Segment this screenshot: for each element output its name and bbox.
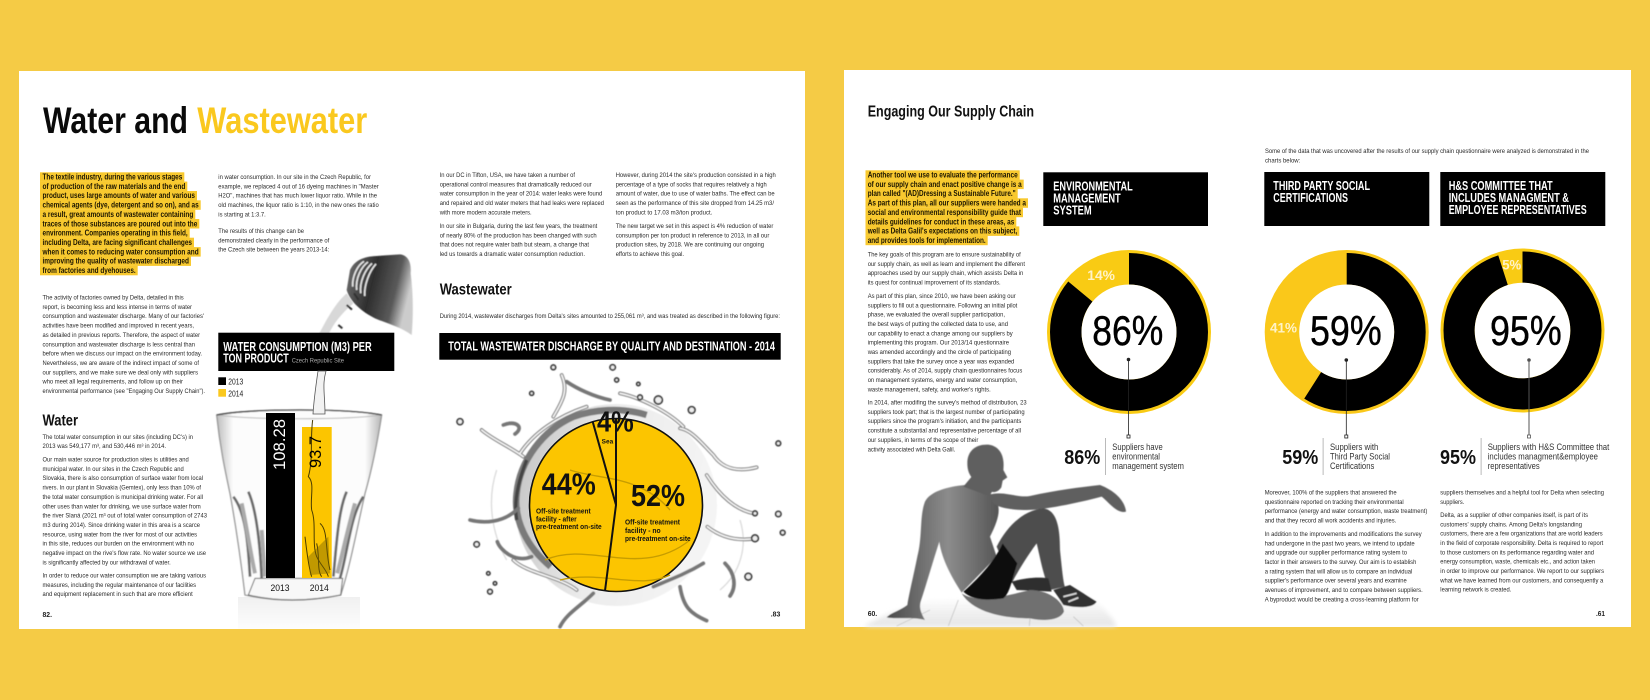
body text: Delta as a supplier: energy consumption, waste, chemicals etc., and action taken [1440, 559, 1595, 566]
label: 44% off-site after pre-treatment: Off-site treatment [536, 506, 591, 515]
label: 4% Sea: Sea [602, 438, 614, 445]
chart title box: water consumption per ton product: TON PRODUCT [223, 352, 289, 366]
body text: suppliers results and rating: performance (energy and water consumption, waste treatment) [1265, 508, 1427, 515]
body text: program goals and survey: activity associated with Delta Galil. [868, 446, 955, 453]
legend: 2013 and 2014: 2013 [228, 377, 244, 386]
body text: program goals and survey: our suppliers, in terms of the scope of their [868, 437, 979, 444]
label: 44% off-site after pre-treatment [536, 466, 602, 531]
chart title box: water consumption per ton product: WATER CONSUMPTION (M3) PER [223, 340, 372, 354]
illustration: seated man photo [863, 445, 1126, 627]
label: 52% off-site no pre-treatment: pre-treatment on-site [625, 534, 691, 543]
body text: water consumption Czech site: is starting at 1:3.7. [218, 211, 266, 218]
chart title box: H&S committee: INCLUDES MANAGMENT & [1449, 191, 1569, 205]
body text: activity of factories: before when we discuss our impact on the environment today. [42, 351, 202, 358]
caption: 95% suppliers with H&S committee: representatives [1488, 461, 1540, 471]
body text: Delta as a supplier: Delta, as a supplier of other companies itself, is part of its [1440, 512, 1588, 519]
chart title box: total wastewater discharge [439, 333, 781, 360]
caption: 59% suppliers with third party social certifications: 59% [1282, 447, 1318, 469]
right arm [988, 485, 1126, 512]
caption: 86% suppliers have environmental management system [1064, 438, 1184, 475]
glass reflection [238, 597, 360, 629]
body text: Delta as a supplier [1439, 490, 1604, 594]
label: 4% Sea: 4% [597, 407, 634, 439]
highlighted intro text: textile industry: traces of those substances are poured out into the [42, 219, 198, 228]
body text: water consumption: m3 during 2014). Since drinking water in this area is a scarce [42, 522, 200, 529]
page number 82: 82. [42, 612, 52, 619]
body text: program goals and survey: suppliers to fill out a questionnaire. Following an initial pilot [868, 302, 1017, 309]
body text: Tifton and Bulgaria: operational control measures that dramatically reduced our [440, 181, 592, 188]
body text: activity of factories: our suppliers, and we make sure we deal only with suppliers [42, 369, 198, 376]
body text: program goals and survey: approaches used by our supply chain, which assists Delta in [868, 270, 1024, 277]
chart title box: third party social certifications [1264, 172, 1429, 226]
highlighted intro text: sustainable future plan: of our supply chain and enact positive change is a [868, 180, 1022, 189]
caption: 59% suppliers with third party social certifications [1282, 438, 1390, 475]
legend: 2013 and 2014: 2014 [228, 389, 244, 398]
floor [863, 597, 1117, 627]
label: 52% off-site no pre-treatment: Off-site treatment [625, 517, 680, 526]
body text: Delta as a supplier: suppliers. [1440, 499, 1464, 506]
donut chart: environmental management system 86%: 14% [1087, 267, 1116, 283]
body text: 2014 production and target: The new target we set in this aspect is 4% reduction of water [616, 223, 774, 230]
donut chart: third party social certifications 59% [1265, 250, 1429, 414]
donut chart: third party social certifications 59%: 41% [1270, 320, 1298, 336]
body text: suppliers results and rating: questionnaire reported on tracking their environmental [1265, 499, 1404, 506]
chart title box: third party social certifications: CERTIFICATIONS [1273, 191, 1348, 205]
body text: water consumption Czech site: example, we replaced 4 out of 16 dyeing machines in "Master [218, 183, 380, 190]
body text: activity of factories: consumption and wastewater discharge is less central than [42, 341, 195, 348]
body text: program goals and survey: on management systems, energy and water consumption, [868, 377, 1017, 384]
body text: water consumption: measures, including the regular maintenance of our facilities [42, 582, 196, 589]
title: Water and Wastewater: Water and [43, 100, 188, 141]
body text: water consumption: and equipment replacement in such that are more efficient [42, 591, 193, 598]
glass [217, 410, 382, 600]
body text: 2014 production and target: ton product to 17.03 m3/ton product. [616, 209, 713, 216]
value label 93.7: 93.7 [306, 436, 325, 468]
body text: water consumption [42, 434, 207, 598]
body text: water consumption: the total water consumption is municipal drinking water. For all [42, 494, 203, 501]
body text: activity of factories: The activity of factories owned by Delta, detailed in this [42, 294, 184, 302]
body text: activity of factories: consumption and wastewater discharge. Many of our factories' [42, 313, 204, 320]
body text: water consumption: is significantly affected by our withdrawal of water. [42, 559, 171, 566]
body text: Tifton and Bulgaria [439, 172, 604, 258]
chart title box: H&S committee: EMPLOYEE REPRESENTATIVES [1449, 203, 1587, 217]
body text: water consumption Czech site [218, 174, 380, 254]
body text: Delta as a supplier: what we have learned from our customers, and consequently a [1439, 577, 1604, 584]
raised leg [997, 508, 1065, 590]
bar: 2013 value 108.28 [266, 413, 295, 578]
body text: water consumption Czech site: The results of this change can be [218, 228, 304, 235]
caption: 86% suppliers have environmental management system: 86% [1064, 447, 1100, 469]
bar chart in glass: water consumption 2013 vs 2014 [217, 371, 382, 629]
body text: Delta as a supplier: in order to improve our performance. We report to our suppliers [1440, 568, 1604, 575]
donut chart: H&S committee 95%: 95% [1490, 307, 1562, 354]
caption: 95% suppliers with H&S committee [1440, 438, 1610, 475]
highlighted intro text: textile industry: improving the quality of wastewater discharged [42, 257, 189, 266]
highlighted intro text: textile industry: a result, great amounts of wastewater containing [42, 210, 193, 219]
page number 61: .61 [1596, 611, 1605, 618]
body text: suppliers results and rating: had undergone in the past two years, we intend to update [1265, 540, 1415, 547]
highlighted intro text: sustainable future plan: well as Delta Galil's expectations on this subject, [867, 227, 1017, 236]
label: 44% off-site after pre-treatment: pre-treatment on-site [536, 522, 602, 531]
label: 44% off-site after pre-treatment: facility - after [536, 514, 577, 523]
caption: 59% suppliers with third party social certifications: Certifications [1330, 461, 1375, 471]
body text: Tifton and Bulgaria: led us towards a dramatic water consumption reduction. [440, 251, 585, 258]
heading: Wastewater: Wastewater [440, 281, 512, 298]
highlighted intro text: sustainable future plan: As part of this plan, all our suppliers were handed a [868, 199, 1026, 208]
title: Water and Wastewater: Wastewater [197, 100, 367, 141]
body text: program goals and survey: the best ways of putting the collected data to use, and [868, 321, 1008, 328]
body text: water consumption: the river Slaná (2021 m³ out of total water consumption of 2743 [42, 513, 207, 520]
chart title box: water consumption per ton product: Czech Republic Site [292, 358, 345, 364]
body text: suppliers results and rating: and upgrade our supplier performance rating system to [1265, 550, 1407, 557]
label: 52% off-site no pre-treatment: facility - no [625, 526, 661, 535]
body text: suppliers results and rating: A byproduct would be creating a cross-learning platform for [1265, 596, 1420, 603]
body text: program goals and survey: constitute a substantial and representative percentage of all [868, 428, 1021, 435]
highlighted intro text: textile industry: from factories and dyehouses. [42, 266, 136, 275]
head and neck [963, 477, 998, 496]
chart title box: H&S committee [1440, 172, 1605, 226]
body text: suppliers results and rating: and that they record all work accidents and injuries. [1265, 518, 1396, 525]
donut chart: H&S committee 95% [1440, 248, 1604, 412]
body text: water consumption: The total water consumption in our sites (including DC's) in [42, 434, 193, 441]
heading: Water: Water [42, 413, 78, 430]
body text: data intro: Some of the data that was uncovered after the results of our supply chain questionnaire were analyzed is demonstrated in the [1265, 148, 1589, 155]
page number 60: 60. [868, 611, 877, 618]
value label 108.28: 108.28 [270, 419, 289, 470]
leader line: donut 95% to caption [1528, 359, 1530, 438]
chart title box: environmental management system: SYSTEM [1053, 203, 1092, 217]
pouring water stream [313, 371, 326, 414]
bar: 2014 value 93.7 [302, 427, 332, 578]
body text: Tifton and Bulgaria: In our site in Bulgaria, during the last few years, the treatment [440, 223, 597, 230]
donut chart: environmental management system 86% [1047, 250, 1211, 414]
right spread page [844, 70, 1631, 627]
body text: 2014 production and target: production sites, by 2018. We are continuing our ongoing [616, 242, 764, 249]
body text: activity of factories: environmental performance (see "Engaging Our Supply Chain"). [42, 388, 205, 395]
highlighted intro text: textile industry: The textile industry, during the various stages [42, 172, 183, 182]
body text: Delta as a supplier: learning network is created. [1440, 587, 1511, 594]
body text: activity of factories [42, 294, 205, 395]
body text: water consumption: resource, using water from the river for most of our activities [42, 531, 197, 538]
body text: data intro: charts below: [1265, 158, 1301, 164]
leader line: donut 86% to caption [1127, 358, 1130, 438]
body text: Tifton and Bulgaria: and repaired and old water meters that had leaks were replaced [440, 200, 604, 207]
body text: program goals and survey: waste management, safety, and worker's rights. [867, 386, 991, 394]
chart title box: third party social certifications: THIRD PARTY SOCIAL [1273, 179, 1370, 193]
heading: Engaging Our Supply Chain: Engaging Our Supply Chain [868, 104, 1034, 121]
leader line: donut 59% to caption [1345, 359, 1348, 438]
caption: 95% suppliers with H&S committee: 95% [1440, 447, 1476, 469]
illustration: water splash around pie chart [457, 365, 785, 627]
body text: suppliers results and rating: a rating system that will allow us to compare an individual [1265, 568, 1412, 575]
highlighted intro text: textile industry: product, uses large amounts of water and various [42, 191, 195, 200]
chart title box: total wastewater discharge: TOTAL WASTEWATER DISCHARGE BY QUALITY AND DESTINATION - 2014 [448, 340, 775, 354]
body text: activity of factories: Nevertheless, we are aware of the indirect impact of some of [42, 360, 199, 367]
highlighted intro text: textile industry: when it comes to reducing water consumption and [42, 247, 199, 256]
chart title box: environmental management system: MANAGEMENT [1053, 192, 1121, 206]
body text: program goals and survey: suppliers since the program's initiation, and the participants [868, 418, 1021, 425]
body text: 2014 production and target: However, during 2014 the site's production consisted in a high [616, 172, 776, 179]
body text: water consumption: other uses than water for drinking, we use surface water from [42, 503, 201, 510]
body text: 2014 production and target: percentage of a type of socks that requires relatively a high [616, 181, 767, 188]
body text: 2014 production and target: consumption per ton product in reference to 2013, in all our [616, 232, 770, 239]
highlighted intro text: sustainable future plan: plan called "(AD)Dressing a Sustainable Future." [868, 189, 1016, 198]
body text: Tifton and Bulgaria: of nearly 80% of the production has been changed with such [440, 232, 597, 239]
page number 83: .83 [771, 612, 780, 618]
body text: suppliers results and rating [1265, 490, 1427, 603]
body text: Tifton and Bulgaria: that does not require water bath but steam, a change that [440, 242, 589, 249]
legend: 2013 and 2014 [218, 377, 244, 398]
body text: program goals and survey: its quest for continual improvement of its standards. [868, 280, 1001, 287]
body text: water consumption: Slovakia, there is also consumption of surface water from local [42, 475, 203, 482]
body text: water consumption Czech site: the Czech site between the years 2013-14: [218, 247, 330, 254]
left spread page [19, 71, 805, 629]
body text: 2014 production and target: seen as the performance of this site dropped from 14.25 m3/ [616, 200, 774, 207]
near leg [962, 590, 1064, 620]
highlighted intro text: sustainable future plan: and provides tools for implementation. [868, 236, 986, 245]
body text: water consumption Czech site: in water consumption. In our site in the Czech Republic, for [218, 174, 372, 181]
caption: 59% suppliers with third party social certifications: Suppliers with [1330, 442, 1378, 452]
body text: Delta as a supplier: customers, there are a few organizations that are world leaders [1440, 531, 1603, 538]
shorts [963, 543, 1017, 600]
body text: Delta as a supplier: suppliers themselves and a helpful tool for Delta when selecting [1440, 490, 1604, 496]
body text: activity of factories: report, is becoming less and less intense in terms of water [42, 304, 193, 311]
body text: suppliers results and rating: avenues of improvement, and to compare between suppliers. [1265, 587, 1423, 594]
body text: Delta as a supplier: customers' supply chains. Among Delta's longstanding [1440, 521, 1582, 528]
body text: water consumption: municipal water. In our sites in the Czech Republic and [42, 466, 184, 473]
caption: 86% suppliers have environmental management system: environmental [1112, 452, 1160, 462]
body text: program goals and survey: was amended accordingly and the circle of participating [867, 349, 1011, 356]
body text: program goals and survey: phase, we evaluated the overall supplier participation, [868, 312, 1005, 319]
highlighted intro text: textile industry: of production of the raw materials and the end [42, 182, 185, 191]
body text: water consumption: Our main water source for production sites is utilities and [42, 456, 189, 464]
label: 44% off-site after pre-treatment: 44% [542, 466, 596, 501]
title: Water and Wastewater [43, 100, 367, 141]
caption: 86% suppliers have environmental management system: Suppliers have [1112, 442, 1163, 452]
body text: Delta as a supplier: in the field of corporate responsibility. Delta is required to report [1440, 540, 1603, 547]
highlighted intro text: sustainable future plan: Another tool we use to evaluate the performance [868, 170, 1018, 180]
body text: water consumption Czech site: old machines, the liquor ratio is 1:10, in the new ones the ratio [218, 202, 379, 209]
body text: wastewater discharges: During 2014, wastewater discharges from Delta's sites amounted to 255,061 m³, and was treated as described in the following figure: [440, 313, 780, 320]
body text: Tifton and Bulgaria: with more modern accurate meters. [439, 209, 532, 216]
caption: 59% suppliers with third party social certifications: Third Party Social [1330, 452, 1390, 462]
shoes [1012, 578, 1052, 592]
body text: program goals and survey: As part of this plan, since 2010, we have been asking our [868, 293, 1016, 300]
body text: suppliers results and rating: supplier's performance over several years and examine [1265, 578, 1407, 585]
body text: 2014 production and target [616, 172, 776, 258]
highlighted intro text: textile industry: including Delta, are facing significant challenges [42, 238, 192, 247]
label: 52% off-site no pre-treatment: 52% [631, 478, 685, 513]
pie chart: wastewater by destination [530, 407, 702, 592]
body text: 2014 production and target: efforts to achieve this goal. [616, 251, 684, 258]
highlighted intro text: sustainable future plan [866, 170, 1028, 245]
body text: program goals and survey: The key goals of this program are to ensure sustainability of [868, 252, 1021, 258]
chart title box: environmental management system: ENVIRONMENTAL [1053, 180, 1133, 194]
body text: Tifton and Bulgaria: water consumption in the year of 2014: water leaks were found [439, 191, 603, 198]
body text: suppliers results and rating: Moreover, 100% of the suppliers that answered the [1265, 490, 1397, 496]
axis label 2013: 2013 [270, 583, 290, 594]
body text: Delta as a supplier: to those customers on its performance regarding water and [1440, 549, 1594, 556]
body text: water consumption: rivers. In our plant in Slovakia (Gemtex), only less than 10% of [42, 485, 201, 492]
body text: activity of factories: as detailed in previous reports. Therefore, the aspect of water [42, 332, 201, 339]
body text: Tifton and Bulgaria: In our DC in Tifton, USA, we have taken a number of [440, 172, 575, 179]
highlighted intro text: textile industry [40, 172, 201, 275]
body text: program goals and survey: implementing this program. Our 2013/14 questionnaire [868, 340, 1009, 347]
body text: program goals and survey [867, 252, 1027, 453]
donut chart: H&S committee 95%: 5% [1502, 256, 1522, 272]
body text: suppliers results and rating: In addition to the improvements and modifications the survey [1265, 531, 1422, 538]
body text: program goals and survey: suppliers took part; that is the largest number of participating [868, 409, 1025, 416]
body text: program goals and survey: considerably. As of 2014, supply chain questionnaires focus [868, 368, 1022, 375]
donut chart: environmental management system 86%: 86% [1092, 307, 1163, 354]
body text: program goals and survey: our supply chain, as well as learn and implement the different [868, 261, 1025, 268]
chart title box: H&S committee: H&S COMMITTEE THAT [1449, 179, 1553, 193]
body text: water consumption: In order to reduce our water consumption we are taking various [42, 572, 206, 580]
body text: activity of factories: activities have been modified and improved in recent years, [42, 323, 194, 330]
left arm and torso [887, 485, 999, 620]
highlighted intro text: sustainable future plan: details guidelines for conduct in these areas, as [868, 217, 1015, 226]
body text: suppliers results and rating: factor in their answers to the survey. Our aim is to establish [1265, 559, 1417, 566]
body text: activity of factories: who meet all legal requirements, and follow up on their [42, 379, 184, 386]
water stream in yellow bar [305, 420, 330, 577]
body text: 2014 production and target: amount of water, due to use of water baths. The effect can be [616, 191, 775, 198]
body text: program goals and survey: our capability to enact a change among our suppliers by [868, 330, 1013, 337]
illustration: bottle pouring water [318, 254, 413, 335]
body text: program goals and survey: In 2014, after modifing the survey's method of distribution, 23 [868, 400, 1027, 406]
body text: data intro [1265, 148, 1589, 164]
label: 52% off-site no pre-treatment [625, 478, 691, 543]
body text: water consumption: 2013 was 549,177 m³, and 530,446 m³ in 2014. [42, 443, 166, 450]
axis label 2014: 2014 [310, 583, 329, 594]
body text: water consumption: negative impact on the rive's flow rate. No water source we use [42, 550, 206, 557]
caption: 86% suppliers have environmental management system: management system [1112, 461, 1184, 471]
body text: water consumption: in this site, reduces our burden on the environment with no [42, 541, 194, 548]
chart title box: water consumption per ton product [218, 333, 394, 371]
highlighted intro text: textile industry: chemical agents (dye, detergent and so on), and as [42, 201, 199, 210]
donut chart: third party social certifications 59%: 59% [1310, 307, 1382, 354]
body text: water consumption Czech site: demonstrated clearly in the performance of [218, 237, 329, 244]
highlighted intro text: sustainable future plan: social and environmental responsibility guide that [868, 208, 1021, 217]
body text: program goals and survey: suppliers that take the survey once a year was expanded [868, 358, 1015, 365]
body text: water consumption Czech site: H2O", machines that has much lower liquor ratio. While in the [218, 193, 377, 200]
highlighted intro text: textile industry: environment. Companies operating in this field, [42, 229, 188, 238]
caption: 95% suppliers with H&S committee: Suppliers with H&S Committee that [1488, 442, 1610, 452]
chart title box: environmental management system [1043, 172, 1208, 226]
caption: 95% suppliers with H&S committee: includes managment&employee [1488, 452, 1598, 462]
